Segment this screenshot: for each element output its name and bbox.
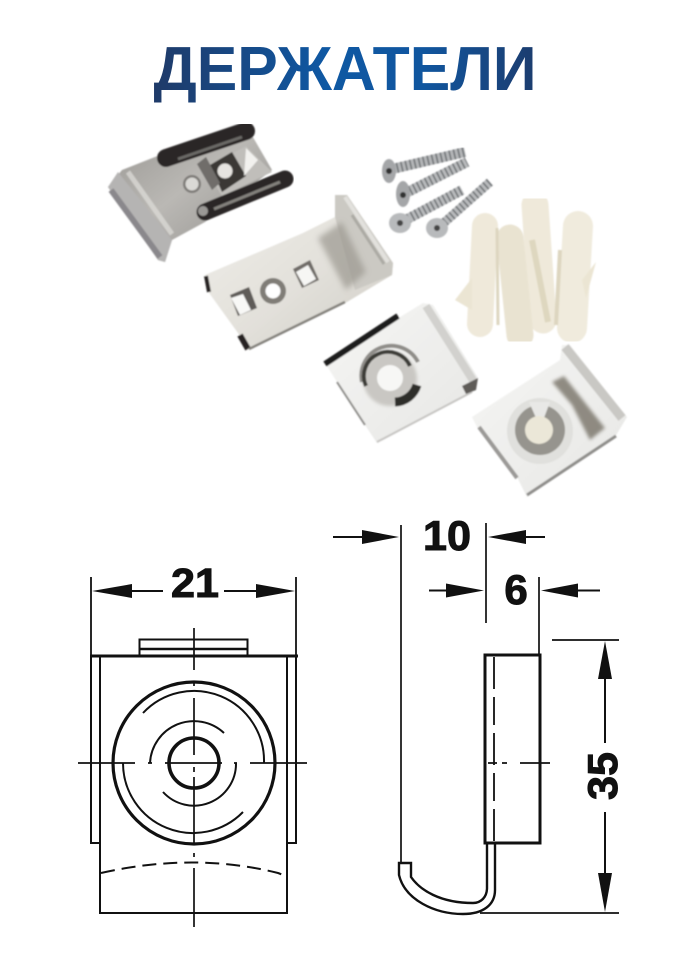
dimension: 6: 6 <box>504 566 528 613</box>
photo: clip with rods <box>108 131 285 262</box>
dimension: 6 <box>429 566 600 655</box>
dimension: 35 <box>480 640 626 913</box>
clip profile <box>399 655 550 914</box>
photo: screws <box>382 152 490 238</box>
dimension: 21 <box>91 560 296 656</box>
photo: clip with black strip <box>325 303 478 443</box>
title: ДЕРЖАТЕЛИ <box>154 35 536 104</box>
centre lines <box>78 628 307 927</box>
photo: set of fittings <box>108 131 627 497</box>
dimension: 10: 10 <box>423 512 471 559</box>
photo: flat clip with holes <box>205 195 393 350</box>
clip body outline <box>90 640 298 913</box>
drawing: front view with dimension 21 <box>78 560 307 927</box>
dimension: 21: 21 <box>171 560 219 606</box>
washer circles <box>113 682 275 844</box>
drawing: side view with dimensions 10, 6, 35 <box>333 512 626 914</box>
photo: clip with rivet <box>472 345 627 497</box>
dimension: 10 <box>333 512 545 862</box>
photo: wall plugs <box>455 205 596 335</box>
dimension: 35: 35 <box>579 752 626 800</box>
